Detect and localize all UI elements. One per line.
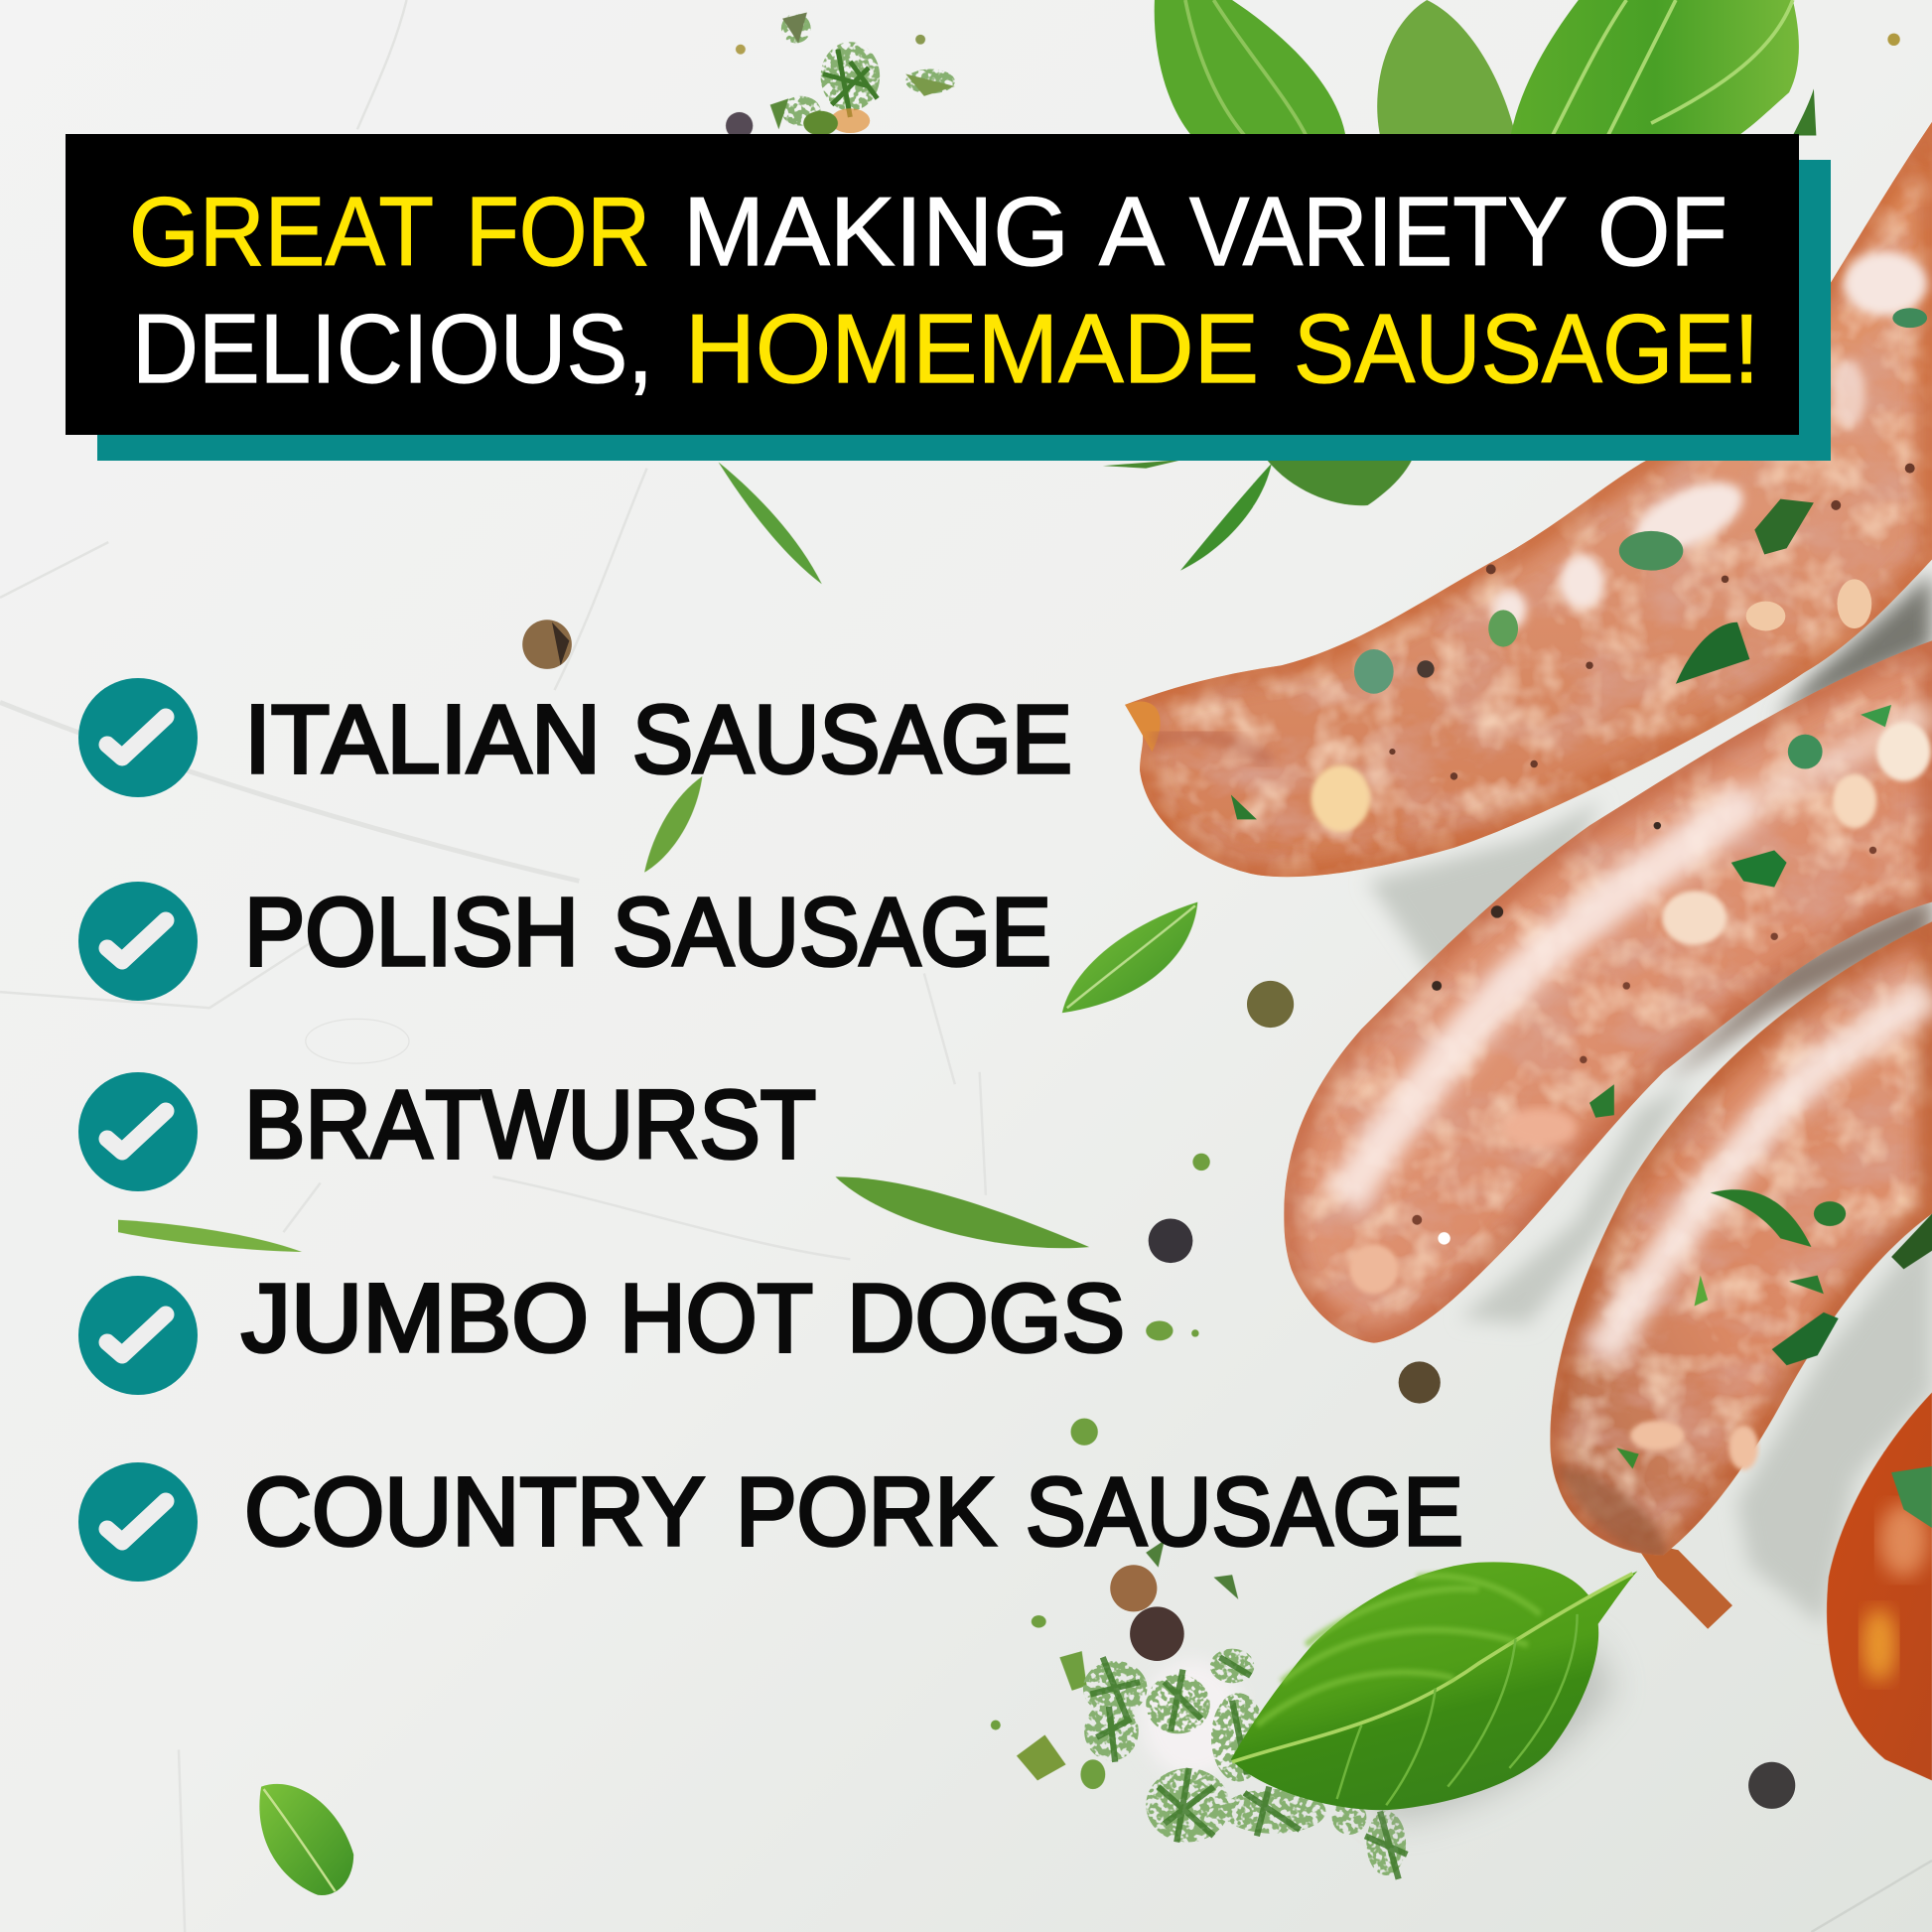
rosemary leaf left [118, 1220, 302, 1252]
list item: Country pork sausage [78, 1457, 1463, 1582]
list item: Polish sausage [78, 878, 1051, 1001]
sausage 4 [1827, 1392, 1932, 1781]
list item: Bratwurst [78, 1070, 816, 1191]
sprig: rosemary centre [644, 776, 702, 873]
sausage 3 white streak [1601, 992, 1932, 1355]
list item: Jumbo hot dogs [78, 1264, 1125, 1395]
list item: Polish sausage: POLISH [244, 878, 579, 986]
headline line 2: SAUSAGE! [1294, 294, 1759, 403]
sausage 3 tail [1632, 1540, 1732, 1629]
sausage 1 white fat highlights [1492, 251, 1927, 629]
icon: check badge [78, 882, 198, 1001]
bottom herb cluster [1083, 1649, 1407, 1879]
green herb specks [991, 1154, 1238, 1789]
headline line 1 [129, 177, 1727, 286]
small basil leaf [259, 1784, 353, 1895]
list item: Italian sausage: SAUSAGE [632, 685, 1072, 793]
list item: Jumbo hot dogs: HOT [620, 1264, 813, 1372]
headline line 2: DELICIOUS, [132, 294, 653, 403]
banner: black panel with headline [66, 134, 1799, 435]
sausage 3 herbs and fat [1616, 1189, 1932, 1470]
icon: check badge [78, 1276, 198, 1395]
sausage 3 [1540, 911, 1932, 1565]
sausage 1 herbs and fat [1125, 308, 1927, 832]
cast shadows under sausages [1368, 573, 1932, 1626]
small green leaf [1062, 901, 1197, 1013]
headline line 1: VARIETY [1189, 177, 1568, 286]
list item: Jumbo hot dogs: DOGS [847, 1264, 1125, 1372]
headline line 1: A [1099, 177, 1166, 286]
list item: Country pork sausage: SAUSAGE [1026, 1457, 1463, 1566]
list item: Bratwurst: BRATWURST [244, 1070, 816, 1178]
headline line 1: GREAT [129, 177, 434, 286]
headline line 1: FOR [466, 177, 650, 286]
rosemary leaf centre right [835, 1176, 1089, 1248]
banner shadow: teal offset panel [97, 160, 1831, 461]
peppercorns [522, 620, 1795, 1809]
list item: Country pork sausage: COUNTRY [244, 1457, 705, 1566]
icon: check badge [78, 1462, 198, 1582]
leaves below banner [719, 460, 1412, 584]
headline line 2: HOMEMADE [685, 294, 1259, 403]
top herb cluster [726, 12, 1900, 139]
headline line 1: MAKING [683, 177, 1069, 286]
headline line 2 [132, 294, 1759, 403]
list item: Country pork sausage: PORK [736, 1457, 996, 1566]
sausage 2 herbs and fat [1349, 705, 1931, 1294]
headline line 1: OF [1597, 177, 1727, 286]
list item: Italian sausage: ITALIAN [244, 685, 601, 793]
sausage 2 [1269, 628, 1932, 1355]
list item: Italian sausage [78, 678, 1072, 797]
large basil leaf [1231, 1562, 1637, 1821]
icon: check badge [78, 1072, 198, 1191]
basil leaves above banner [1155, 0, 1816, 136]
list item: Polish sausage: SAUSAGE [613, 878, 1051, 986]
sausage 2 white streak [1343, 715, 1932, 1201]
icon: check badge [78, 678, 198, 797]
list item: Jumbo hot dogs: JUMBO [241, 1264, 589, 1372]
sausage 1 [1109, 111, 1932, 899]
